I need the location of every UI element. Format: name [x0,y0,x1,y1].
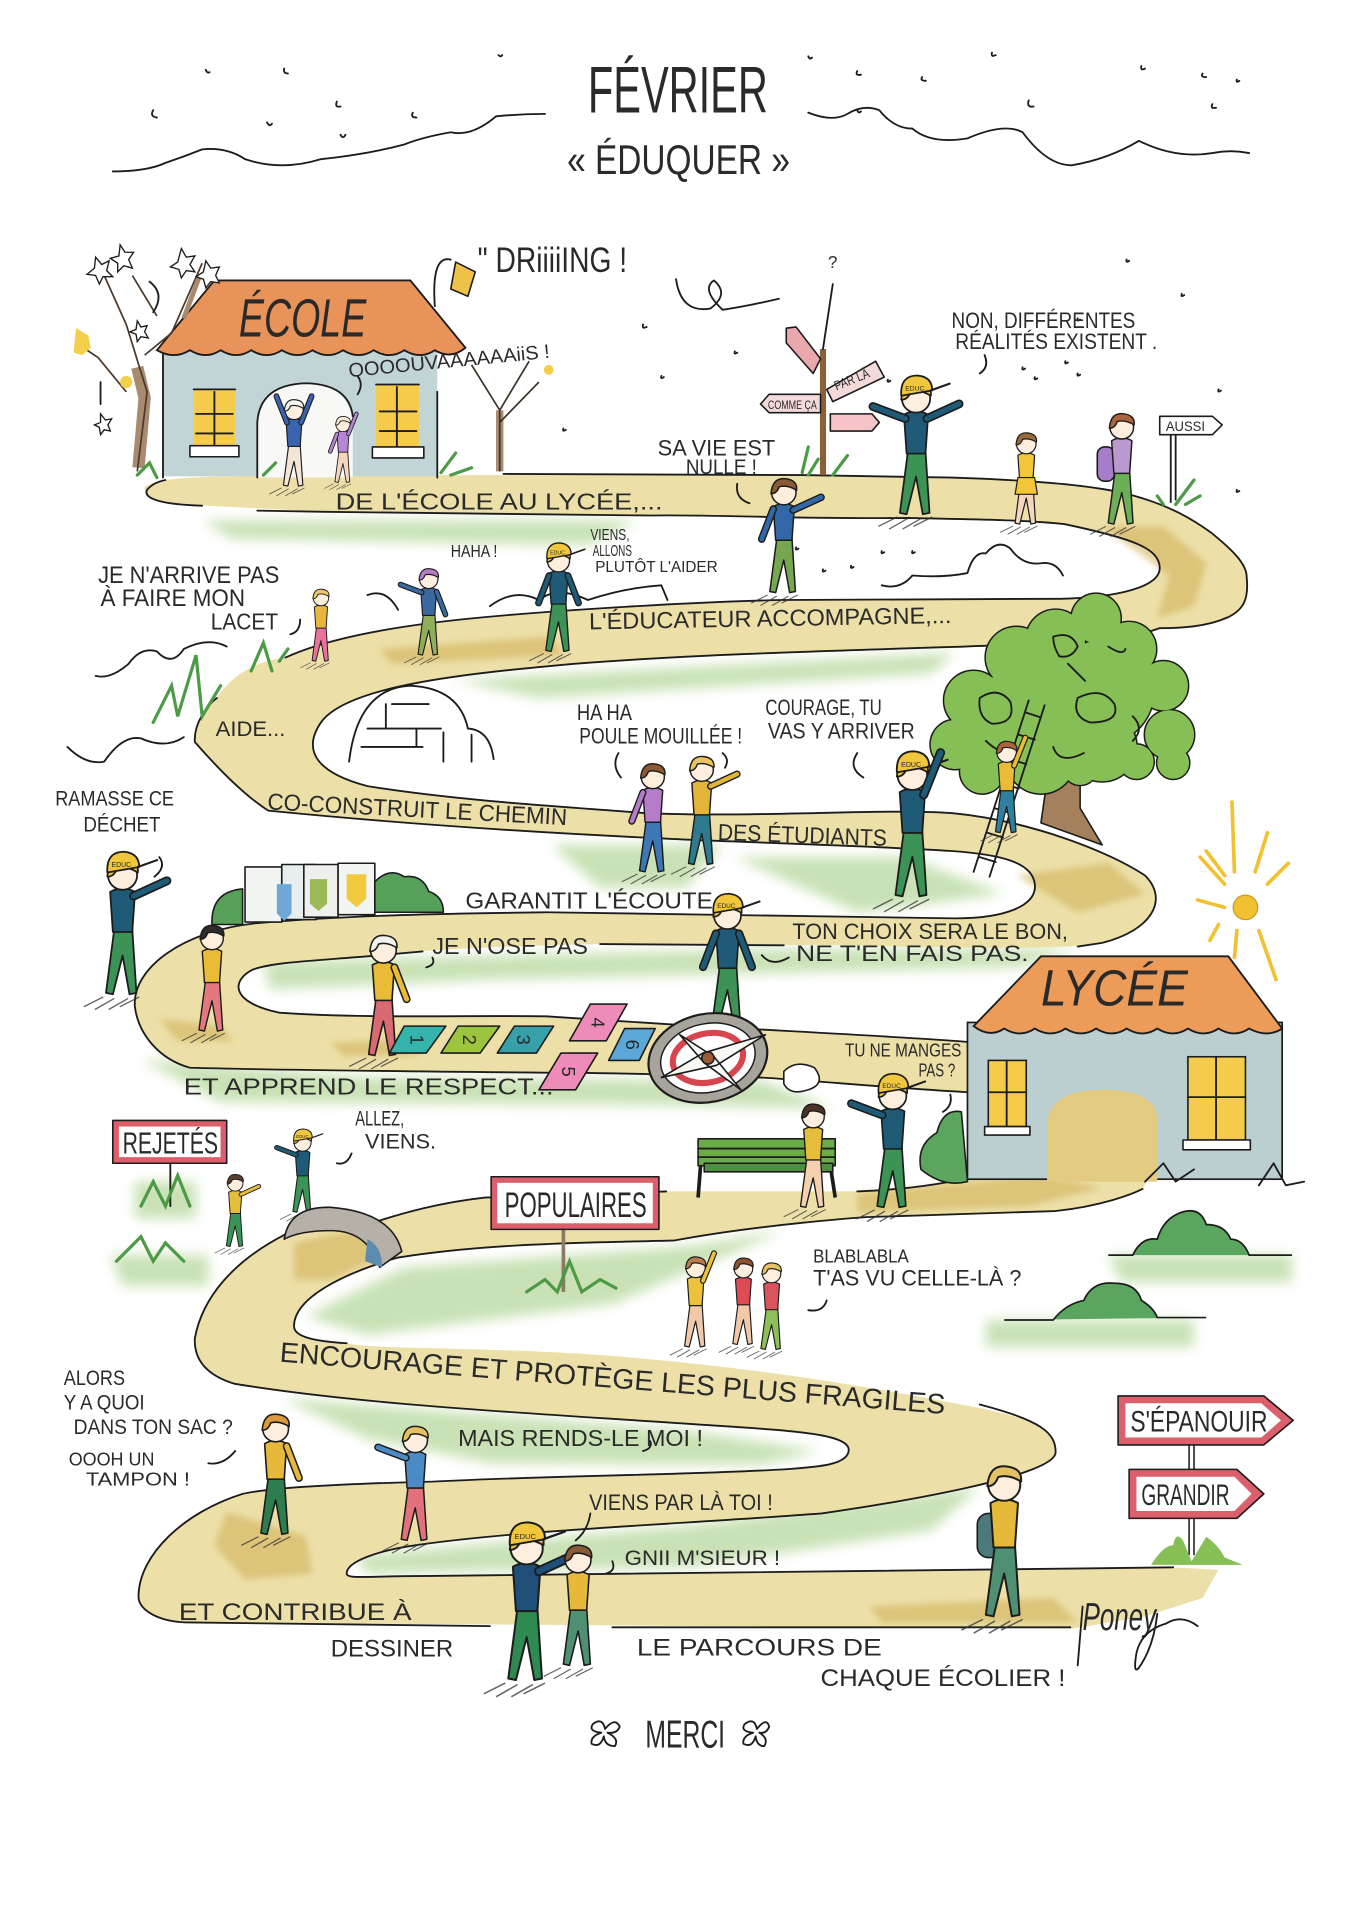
square 3 [497,1026,554,1053]
educator with raised arm [873,751,948,912]
speech: blablabla [813,1245,1021,1291]
educator by bench [851,1074,925,1222]
sign: aussi [1157,416,1222,504]
bush right lower [1004,1283,1206,1320]
thought bubble [784,1064,819,1092]
sign: rejetés [113,1120,227,1206]
speech: gnii m'sieur: GNII M'SIEUR ! [625,1547,780,1570]
sun [1198,802,1288,980]
speech: viens, allons plutôt l'aider [590,527,718,576]
closing text: le parcours de: LE PARCOURS DE [637,1635,882,1662]
shy girl with hat [349,935,407,1069]
école building [157,280,465,478]
speech: blablabla: T'AS VU CELLE-LÀ ? [813,1266,1021,1291]
square 6: 6 [622,1040,643,1050]
square 4: 4 [588,1018,609,1028]
bare tree left [74,245,219,471]
speech: ton choix: NE T'EN FAIS PAS. [796,941,1029,966]
educator walking [529,543,585,663]
hopscotch [390,1004,655,1090]
sign arrow right [830,414,879,431]
educator by bench: EDUC [882,1083,901,1090]
road text: aide: AIDE... [216,718,285,741]
sitting girl [300,589,330,669]
square 2: 2 [459,1035,480,1045]
speech: allez viens: ALLEZ, [355,1107,404,1130]
sign arrow comme ça [761,394,821,413]
road text: co-construit: CO-CONSTRUIT LE CHEMIN [267,788,568,830]
merci with flowers: MERCI [645,1713,725,1756]
bush right upper [1108,1211,1292,1255]
road text: l'éducateur accompagne: L'ÉDUCATEUR ACCOMPAGNE,... [589,602,952,634]
girl one [670,1253,714,1357]
speech: sa vie est nulle: SA VIE EST [658,436,775,461]
child in purple [324,414,356,490]
speech: lacet [98,562,279,634]
speech: différentes réalités [952,308,1157,354]
tree foliage [931,594,1194,793]
sign arrow par là [827,361,884,402]
square 1: 1 [406,1035,427,1045]
speech: ha ha poule mouillée: HA HA [577,700,632,725]
speech: différentes réalités: NON, DIFFÉRENTES [952,308,1135,333]
speech: courage [765,695,915,743]
mountains and stars [113,53,1249,572]
speech: alors y a quoi: ALORS [64,1367,125,1390]
lycée walls [967,1022,1282,1179]
educator with boy: EDUC [514,1532,537,1541]
girl walking away [961,1466,1023,1633]
speech: viens, allons plutôt l'aider: VIENS, [590,527,630,544]
sign: populaires [491,1177,659,1292]
tree leaf scribbles [979,635,1139,758]
educator center: EDUC [717,903,736,910]
speech: haha: HAHA ! [451,541,497,561]
speech: différentes réalités: RÉALITÉS EXISTENT . [955,329,1157,354]
speech: lacet: LACET [211,608,278,634]
signpost: ? [828,252,837,272]
speech: alors y a quoi [64,1367,233,1439]
children at school door [269,396,356,496]
child on ladder [981,738,1025,843]
sign: aussi: AUSSI [1166,419,1205,434]
sign arrow top [786,327,821,373]
speech: je n'ose pas: JE N'OSE PAS [432,933,588,959]
boy with purple backpack [1090,414,1135,536]
speech: allez viens [355,1107,436,1154]
road text: des étudiants: DES ÉTUDIANTS [718,819,887,851]
sitting girl on bench [784,1104,826,1219]
grass by lycée [1145,1163,1304,1185]
école left window [190,389,239,457]
école roof [157,280,465,355]
bush by lycée [920,1111,967,1183]
signature: Poney [1083,1596,1158,1639]
boy in yellow [671,756,737,877]
closing text: chaque écolier: CHAQUE ÉCOLIER ! [821,1665,1065,1692]
girl two [719,1258,754,1354]
square 6 [609,1029,655,1060]
speech: courage: VAS Y ARRIVER [768,718,915,743]
winding road [135,474,1247,1629]
sign arrow par là: PAR LÀ [832,366,872,393]
speech: ton choix [792,919,1068,966]
girl three [747,1263,782,1359]
arrow grandir [1129,1469,1264,1518]
speech: ouais: OOOOUVAAAAAAiiS ! [347,341,551,382]
road text: apprend le respect: ET APPREND LE RESPECT... [184,1074,554,1100]
speech: sa vie est nulle: NULLE ! [686,456,757,479]
speech: viens, allons plutôt l'aider: ALLONS [593,543,632,560]
educator left pointing: EDUC [112,862,131,869]
closing text: dessiner: DESSINER [331,1636,453,1663]
square 4 [570,1004,627,1041]
speech: ramasse [55,788,174,836]
bush right of bins [375,873,443,912]
educator at signpost [873,376,959,529]
educator welcoming child [277,1129,323,1221]
educator at signpost: EDUC [905,385,924,392]
educator with boy [484,1522,576,1697]
small bare tree right [472,361,554,471]
road fill: lower stretches [138,1102,1218,1629]
sign: populaires: POPULAIRES [505,1185,647,1225]
recycling bins [212,863,443,924]
speech: ramasse: DÉCHET [83,813,161,836]
speech: alors y a quoi: Y A QUOI [64,1391,145,1414]
speech: mais rends-le moi: MAIS RENDS-LE MOI ! [458,1425,703,1451]
child holding hand [215,1174,259,1255]
two boys mocking [622,756,737,884]
boy with yellow bag [241,1414,299,1548]
educator with raised arm: EDUC [901,762,921,769]
educator left pointing [84,852,167,1010]
square 3: 3 [513,1035,534,1045]
lycée building [967,956,1282,1182]
grass at école [137,453,472,478]
boy in purple [622,764,666,884]
background hills middle [67,545,1063,762]
speech: allez viens: VIENS. [365,1131,436,1154]
école label: ÉCOLE [239,289,367,349]
road text: encourage et protège: ENCOURAGE ET PROTÈGE LES PLUS FRAGILES [279,1337,947,1420]
grass tuft [153,643,288,722]
tree trunk [1041,771,1102,845]
école right window [372,384,424,458]
speech: tu ne manges pas [845,1040,961,1080]
grass under rejetés [116,1176,190,1261]
speaker ticks [154,355,986,1573]
subtitle: « ÉDUQUER » [567,136,790,183]
arrow grandir: GRANDIR [1141,1479,1230,1512]
educator welcoming child: EDUC [296,1134,309,1139]
boy pointing [751,479,821,605]
sign: s'épanouir and grandir [1118,1396,1293,1565]
arrow s'épanouir [1118,1396,1293,1445]
educator walking: EDUC [550,551,565,557]
road outlines [135,474,1247,1092]
three popular girls [670,1253,782,1359]
arrow s'épanouir: S'ÉPANOUIR [1130,1405,1267,1438]
lycée roof [974,956,1282,1033]
road text: et contribue à: ET CONTRIBUE À [179,1599,412,1626]
green watercolor patches [110,520,1292,1573]
girl reaching [378,1426,429,1553]
sign: rejetés: REJETÉS [123,1125,218,1160]
girl in yellow dress [1000,433,1037,534]
speech: alors y a quoi: DANS TON SAC ? [74,1416,233,1439]
signature [1078,1596,1198,1670]
speech: sa vie est nulle [658,436,775,479]
lycée label: LYCÉE [1041,958,1189,1016]
speech: tu ne manges pas: TU NE MANGES [845,1040,961,1061]
bench [698,1139,835,1198]
lycée left window [985,1060,1030,1135]
speech: ha ha poule mouillée [577,700,742,748]
grass under populaires [527,1261,616,1292]
child in blue [269,396,312,496]
école walls [163,349,437,478]
walking girl [182,925,225,1043]
speech: tu ne manges pas: PAS ? [918,1059,955,1080]
road fill: upper stretches [135,475,1247,1092]
bridge [284,1207,402,1267]
sign arrow comme ça: COMME ÇA [768,398,817,412]
educator center [691,894,760,1040]
bell [434,259,475,306]
square 1 [390,1026,446,1053]
square 2 [441,1026,500,1053]
lycée right window [1183,1057,1250,1150]
speech: driiiing: " DRiiiiING ! [478,240,627,280]
ladder [974,700,1045,877]
speech: oooh un tampon [69,1449,190,1489]
speech: oooh un tampon: TAMPON ! [86,1468,190,1489]
speech: viens par là toi: VIENS PAR LÀ TOI ! [589,1490,773,1515]
speech: blablabla: BLABLABLA [813,1245,909,1266]
title: FÉVRIER [588,54,768,128]
speech: ha ha poule mouillée: POULE MOUILLÉE ! [579,723,742,748]
signpost [676,252,884,475]
bush left of bins [212,889,243,924]
arch line [257,383,353,478]
boy in yellow with educator [544,1545,593,1679]
bench with girl [698,1104,835,1219]
road text: garantit l'écoute: GARANTIT L'ÉCOUTE [465,888,713,914]
speech: courage: COURAGE, TU [765,695,882,720]
ochre shading on road [159,527,1206,1622]
speech: ton choix: TON CHOIX SERA LE BON, [792,919,1068,944]
igloo [349,686,494,762]
speech: ramasse: RAMASSE CE [55,788,174,811]
compass wheel [640,1002,776,1114]
speech: lacet: JE N'ARRIVE PAS [98,562,279,589]
kid with pompom hat [400,569,445,665]
école door [257,383,353,478]
road text: de l'école au lycée: DE L'ÉCOLE AU LYCÉE,... [336,488,663,514]
merci with flowers [591,1713,769,1756]
lycée door [1047,1090,1157,1182]
square 5 [539,1053,598,1090]
speech: viens, allons plutôt l'aider: PLUTÔT L'AIDER [595,557,718,576]
speech: oooh un tampon: OOOH UN [69,1449,154,1470]
speech: lacet: À FAIRE MON [101,585,245,612]
big tree [931,594,1194,845]
square 5: 5 [558,1067,579,1077]
